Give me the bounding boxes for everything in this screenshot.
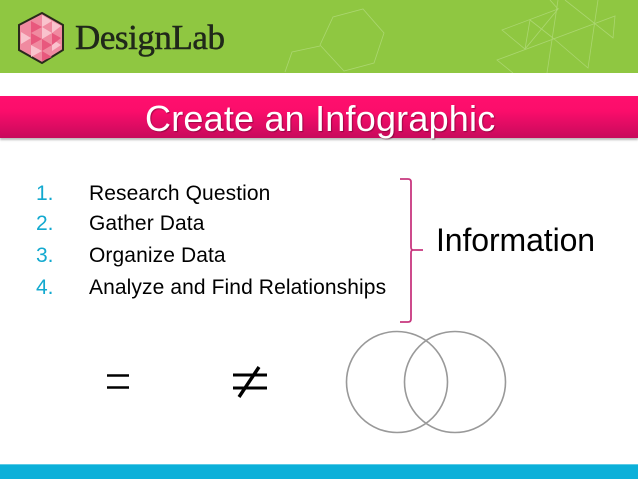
icon: DesignLab hexagon logo [18, 12, 64, 64]
item 2 [36, 212, 204, 235]
item 1: 1. [36, 182, 54, 205]
venn diagram [346, 330, 506, 434]
item 3: Organize Data [89, 244, 226, 267]
right brace [400, 178, 423, 323]
green header banner [0, 0, 638, 73]
title bar [0, 96, 638, 138]
item 3: 3. [36, 244, 54, 267]
icon: equals sign [107, 374, 129, 389]
logo wordmark: DesignLab [75, 18, 225, 57]
icon: not equal sign [233, 366, 267, 398]
item 4: Analyze and Find Relationships [89, 276, 386, 299]
item 1: Research Question [89, 182, 270, 205]
bottom blue bar [0, 464, 638, 479]
title: Create an Infographic [145, 98, 495, 139]
item 4: 4. [36, 276, 54, 299]
label: Information: Information [436, 222, 595, 258]
numbered list [36, 182, 386, 299]
item 2: 2. [36, 212, 54, 235]
item 2: Gather Data [89, 212, 204, 235]
